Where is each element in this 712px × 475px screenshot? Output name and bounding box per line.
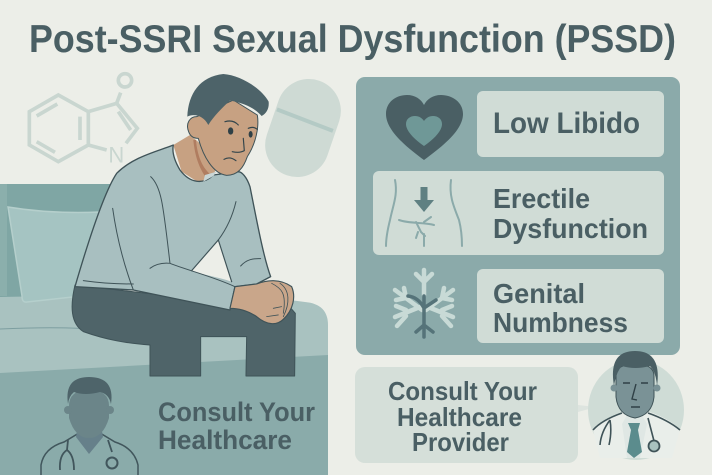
symptom: low libido: Low Libido bbox=[493, 107, 640, 140]
icon: molecule bbox=[29, 74, 137, 168]
panel: symptoms bbox=[356, 77, 680, 355]
neck bbox=[173, 135, 220, 183]
text: consult your healthcare bbox=[158, 397, 315, 455]
symptom: erectile dysfunction bbox=[373, 171, 664, 255]
hands bbox=[230, 281, 294, 324]
icon: snowflake nerve bbox=[395, 270, 453, 337]
symptom: genital numbness: Genital bbox=[493, 278, 585, 309]
icon: doctor portrait bbox=[588, 351, 684, 460]
trousers bbox=[72, 285, 295, 376]
callout: consult provider bbox=[355, 367, 596, 463]
symptom: genital numbness bbox=[395, 269, 664, 343]
symptom: erectile dysfunction: Dysfunction bbox=[493, 213, 648, 244]
callout: consult provider: Healthcare bbox=[397, 402, 522, 432]
face bbox=[188, 100, 258, 175]
illustration: seated man bbox=[72, 74, 295, 376]
text: consult your healthcare: Consult Your bbox=[158, 397, 315, 427]
symptom: low libido bbox=[386, 91, 664, 160]
text: consult your healthcare: Healthcare bbox=[158, 425, 292, 455]
icon: pelvis with arrow bbox=[386, 180, 462, 246]
icon: pill bbox=[256, 70, 350, 186]
sweater bbox=[75, 145, 271, 310]
icon: molecule: N bbox=[108, 143, 124, 168]
callout: consult provider: Consult Your bbox=[388, 376, 537, 406]
symptom: genital numbness: Numbness bbox=[493, 307, 628, 338]
panel: lower left consult panel bbox=[0, 355, 328, 475]
hair bbox=[187, 74, 269, 125]
eyes and mouth bbox=[228, 127, 233, 135]
icon: doctor silhouette bbox=[41, 377, 138, 475]
arm gap bbox=[192, 240, 232, 282]
icon: heart bbox=[386, 95, 463, 160]
couch bbox=[0, 184, 328, 380]
symptom: erectile dysfunction: Erectile bbox=[493, 183, 590, 214]
callout: consult provider: Provider bbox=[412, 427, 509, 457]
